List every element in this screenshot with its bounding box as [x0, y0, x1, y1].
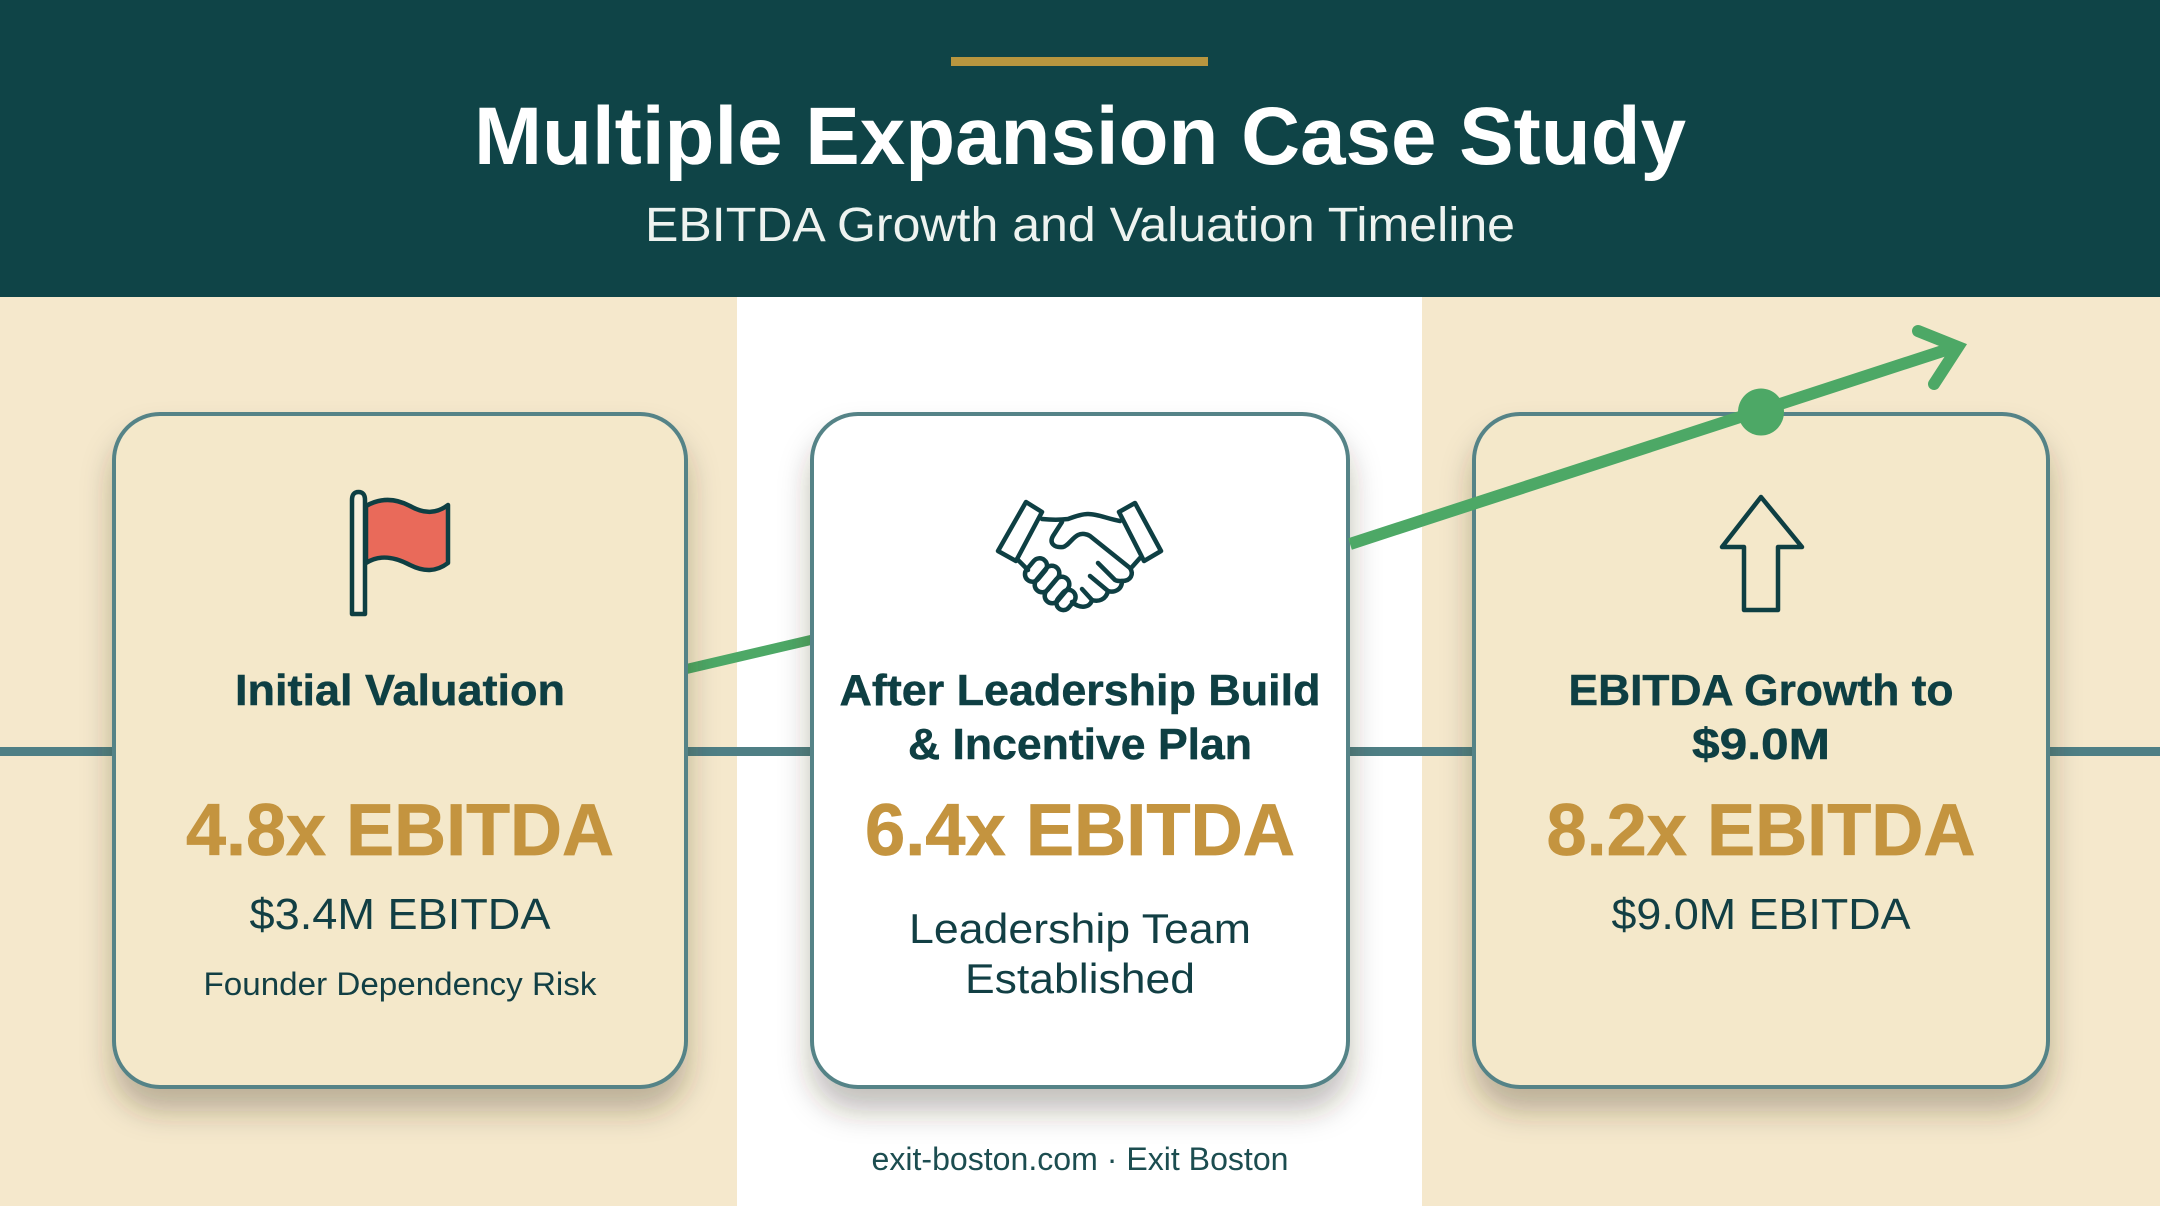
timeline line — [0, 747, 2160, 756]
risk note: Founder Dependency Risk — [204, 966, 598, 1002]
multiple: 8.2x EBITDA — [1546, 790, 1976, 871]
footer credit: exit-boston.com · Exit Boston — [872, 1141, 1288, 1177]
card 2: after leadership build — [812, 414, 1348, 1087]
EBITDA value: $9.0M EBITDA — [1612, 890, 1911, 939]
icon: up arrow — [1722, 497, 1802, 610]
card 2: after leadership build: Established — [965, 955, 1195, 1002]
card 1: initial valuation — [114, 414, 686, 1087]
card 3: EBITDA growth: $9.0M — [1692, 720, 1830, 769]
green trend segment between cards 1 and 2 — [680, 639, 815, 670]
header band — [0, 0, 2160, 297]
multiple: 4.8x EBITDA — [186, 790, 614, 871]
EBITDA value: $3.4M EBITDA — [250, 890, 551, 939]
card 3: EBITDA growth — [1474, 414, 2048, 1087]
background panels — [0, 297, 2160, 1206]
gold accent bar — [951, 57, 1208, 66]
heading: After Leadership Build — [840, 666, 1320, 715]
subtitle: EBITDA Growth and Valuation Timeline — [645, 199, 1515, 252]
heading: Initial Valuation — [235, 666, 565, 715]
icon: handshake — [998, 502, 1161, 613]
green trend arrow with milestone dot — [1350, 331, 1958, 544]
multiple: 6.4x EBITDA — [865, 790, 1295, 871]
milestone note: Leadership Team — [909, 905, 1251, 952]
title: Multiple Expansion Case Study — [474, 91, 1686, 182]
card 2: after leadership build: & Incentive Plan — [908, 720, 1252, 769]
icon: red flag — [352, 492, 448, 614]
heading: EBITDA Growth to — [1568, 666, 1954, 715]
